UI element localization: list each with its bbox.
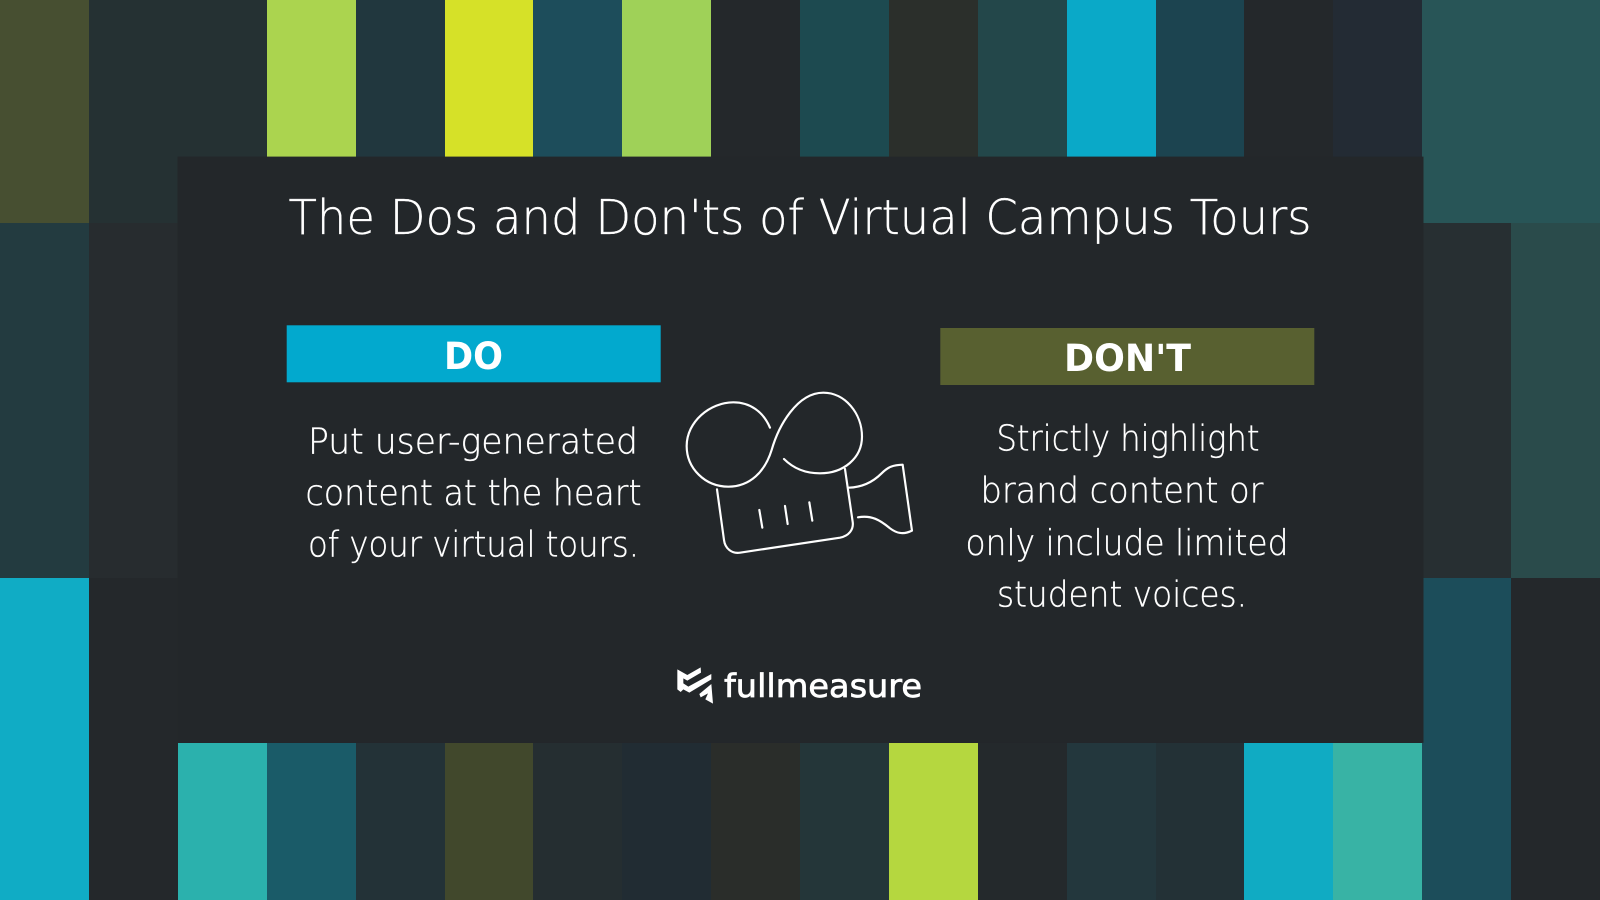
title: The Dos and Don'ts of Virtual Campus Tours — [288, 190, 1312, 246]
don't body text — [966, 419, 1288, 616]
background: bottom colour blocks — [178, 743, 1422, 900]
background: top colour blocks — [0, 0, 1600, 223]
do body text: of your virtual tours. — [308, 525, 639, 566]
panel: don't — [940, 328, 1314, 616]
background: right colour blocks — [1422, 223, 1600, 900]
don't body text: Strictly highlight — [996, 419, 1260, 460]
do body text — [306, 421, 642, 566]
don't header label: DON'T — [1064, 337, 1192, 380]
background: left colour blocks — [0, 223, 178, 900]
do header bar — [287, 325, 661, 382]
do body text: Put user-generated — [308, 421, 638, 462]
central panel — [178, 157, 1424, 743]
do header label: DO — [444, 335, 503, 378]
don't body text: student voices. — [997, 575, 1247, 616]
panel: do — [287, 325, 661, 566]
don't header bar — [940, 328, 1314, 385]
do body text: content at the heart — [306, 473, 642, 514]
don't body text: only include limited — [966, 523, 1288, 564]
logo: fullmeasure — [677, 667, 922, 705]
don't body text: brand content or — [980, 470, 1264, 511]
logo wordmark: fullmeasure — [724, 667, 922, 705]
logo mark — [677, 667, 713, 704]
icon: film camera — [687, 393, 912, 553]
